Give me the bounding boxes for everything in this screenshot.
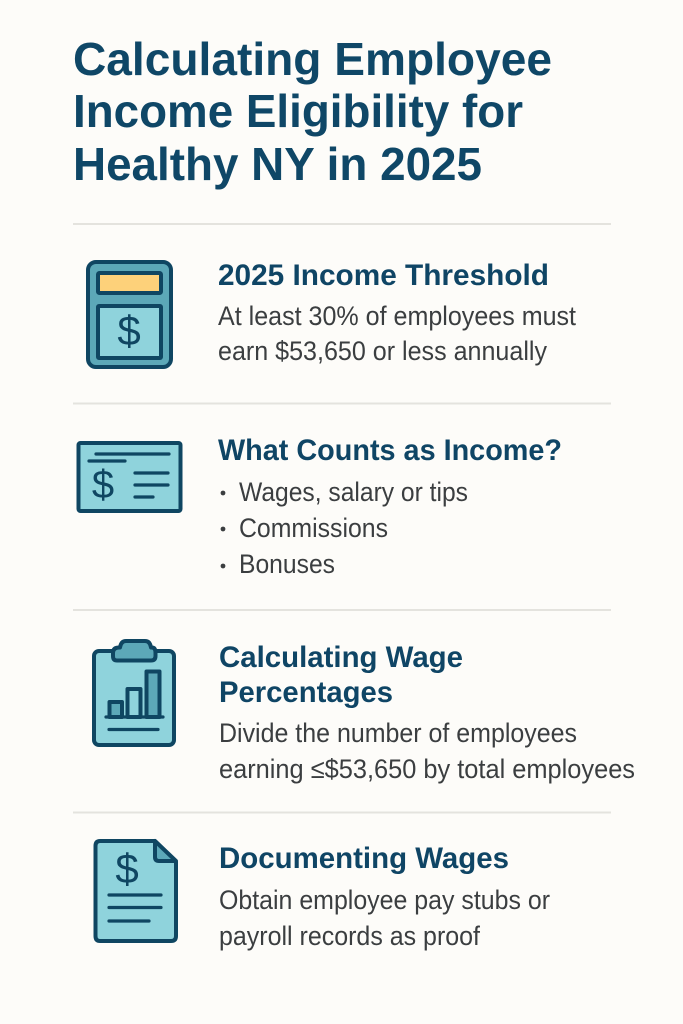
heading: calculating wage percentages: Percentages xyxy=(219,676,393,709)
icon: clipboard with bar chart xyxy=(94,641,174,745)
title: Healthy NY in 2025 xyxy=(73,138,482,190)
text: calculation description: Divide the number of employees xyxy=(219,718,577,748)
heading: calculating wage percentages: Calculating Wage xyxy=(219,641,463,674)
panel: what counts as income xyxy=(78,434,562,579)
icon: document with dollar sign xyxy=(96,841,176,941)
panel: calculating wage percentages xyxy=(94,641,635,784)
text: documentation description: payroll records as proof xyxy=(219,921,480,951)
icon: pay check xyxy=(78,443,180,511)
icon: document with dollar sign: $ xyxy=(115,845,139,892)
list: income types: Wages, salary or tips xyxy=(239,477,468,507)
title: Income Eligibility for xyxy=(73,85,523,137)
text: calculation description: earning ≤$53,650 by total employees xyxy=(219,754,635,784)
title: Calculating Employee xyxy=(73,33,552,85)
text: documentation description: Obtain employee pay stubs or xyxy=(219,885,550,915)
text: threshold description: At least 30% of employees must xyxy=(218,301,576,331)
heading: documenting wages: Documenting Wages xyxy=(219,842,509,875)
heading: calculating wage percentages xyxy=(219,641,463,709)
heading: what counts as income: What Counts as Income? xyxy=(218,434,562,467)
heading: 2025 income threshold: 2025 Income Threshold xyxy=(218,259,549,292)
icon: calculator with dollar sign xyxy=(88,262,171,367)
panel: documenting wages xyxy=(96,841,550,951)
list: income types: Bonuses xyxy=(239,549,335,579)
text: threshold description: earn $53,650 or less annually xyxy=(218,336,547,366)
text: documentation description xyxy=(219,885,550,951)
panel: 2025 income threshold xyxy=(88,259,576,367)
icon: calculator with dollar sign: $ xyxy=(117,307,141,354)
list: income types: Commissions xyxy=(239,513,388,543)
text: threshold description xyxy=(218,301,576,366)
icon: pay check: $ xyxy=(92,463,114,507)
title xyxy=(73,33,552,190)
text: calculation description xyxy=(219,718,635,784)
list: income types xyxy=(221,477,468,579)
